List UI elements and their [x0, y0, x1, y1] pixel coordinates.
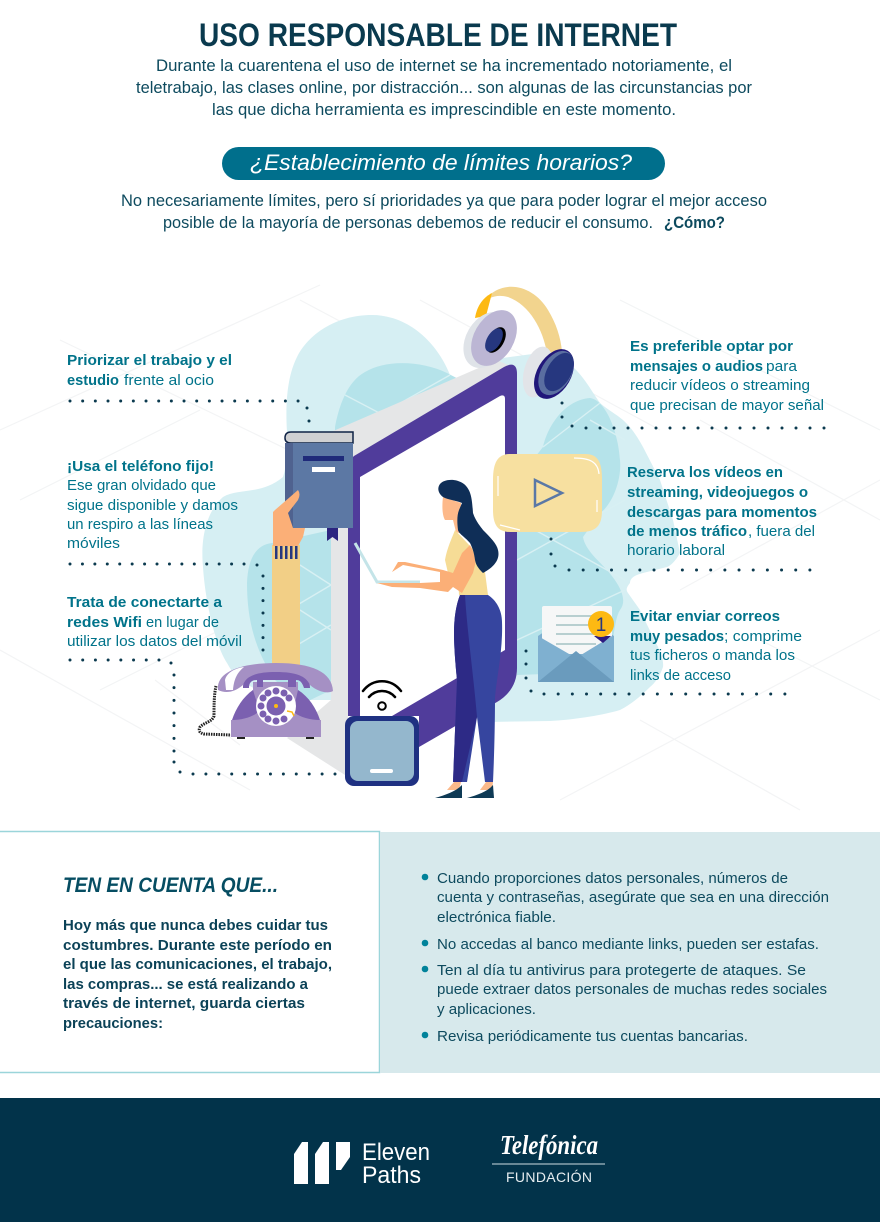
tip: teléfono fijo [67, 458, 238, 552]
heading pill: establecimiento de límites: ¿Establecimiento de límites horarios? [250, 150, 633, 175]
logo: Eleven Paths: Paths [362, 1162, 421, 1189]
tip: redes wifi: redes Wifi [67, 614, 142, 631]
tip: correos pesados: tus ficheros o manda los [630, 647, 795, 664]
tip: mensajes o audios: para [766, 358, 798, 375]
tip: reserva streaming [627, 464, 817, 559]
intro text block [136, 57, 752, 119]
panel: lista de precauciones: Cuando proporciones datos personales, números de [437, 870, 788, 887]
dotted connector: wifi [70, 660, 336, 774]
dotted connector: mensajes o audios [562, 403, 825, 428]
tip: redes wifi: utilizar los datos del móvil [67, 633, 242, 650]
tip: reserva streaming: descargas para momentos [627, 504, 817, 521]
panel: lista de precauciones: Ten al día tu antivirus para protegerte de ataques. Se [437, 962, 806, 979]
tip: teléfono fijo: móviles [67, 535, 120, 552]
tip: reserva streaming: de menos tráfico [627, 523, 747, 540]
illustration: tablet device [287, 360, 517, 775]
panel: ten en cuenta que: el que las comunicaciones, el trabajo, [63, 956, 332, 973]
icon: rotary telephone [199, 663, 333, 739]
tip: teléfono fijo: ¡Usa el teléfono fijo! [67, 458, 214, 475]
tip: correos pesados [630, 608, 802, 684]
panel: lista de precauciones: puede extraer datos personales de muchas redes sociales [437, 981, 827, 998]
tip: mensajes o audios: Es preferible optar por [630, 338, 793, 355]
icon: envelope with notification [538, 606, 614, 682]
tip: mensajes o audios [630, 338, 824, 414]
logo: Telefónica Fundación: FUNDACIÓN [506, 1169, 592, 1185]
tip: correos pesados: Evitar enviar correos [630, 608, 780, 625]
panel: ten en cuenta que: las compras... se está realizando a [63, 976, 309, 993]
tip: mensajes o audios: reducir vídeos o streaming [630, 377, 810, 394]
icon: wifi router [345, 681, 419, 786]
logo: Eleven Paths [294, 1139, 430, 1189]
panel: ten en cuenta que: TEN EN CUENTA QUE... [63, 874, 278, 897]
panel: ten en cuenta que: precauciones: [63, 1015, 163, 1032]
panel: lista de precauciones: electrónica fiable. [437, 909, 556, 926]
panel: lista de precauciones: No accedas al banco mediante links, pueden ser estafas. [437, 936, 819, 953]
footer band [0, 1098, 880, 1222]
dotted connector: priorizar [70, 401, 309, 421]
logo: Telefónica Fundación: Telefónica [500, 1130, 598, 1160]
tip: redes wifi: en lugar de [146, 614, 219, 631]
paragraph: prioridades [121, 192, 767, 232]
dotted connector: correos [526, 651, 786, 694]
icon: book held by arm [272, 432, 353, 665]
panel: ten en cuenta que: costumbres. Durante este período en [63, 937, 332, 954]
tip: priorizar el trabajo [67, 352, 232, 389]
tip: teléfono fijo: sigue disponible y damos [67, 497, 238, 514]
paragraph: prioridades: ¿Cómo? [664, 214, 725, 232]
panel: lista de precauciones [380, 832, 880, 1073]
panel: ten en cuenta que: través de internet, guarda ciertas [63, 995, 305, 1012]
tip: reserva streaming: horario laboral [627, 542, 725, 559]
dotted connector: streaming [551, 539, 811, 570]
tip: correos pesados: links de acceso [630, 667, 731, 684]
tip: priorizar el trabajo: estudio [67, 372, 119, 389]
paragraph: prioridades: posible de la mayoría de personas debemos de reducir el consumo. [163, 214, 653, 232]
tip: priorizar el trabajo: frente al ocio [124, 372, 214, 389]
tip: reserva streaming: streaming, videojuegos o [627, 484, 808, 501]
intro text block: Durante la cuarentena el uso de internet se ha incrementado notoriamente, el [156, 57, 732, 75]
tip: teléfono fijo: un respiro a las líneas [67, 516, 213, 533]
logo: Eleven Paths: Eleven [362, 1139, 430, 1166]
panel: lista de precauciones: Revisa periódicamente tus cuentas bancarias. [437, 1028, 748, 1045]
tip: correos pesados: ; comprime [724, 628, 802, 645]
tip: redes wifi [67, 594, 242, 650]
tip: mensajes o audios: que precisan de mayor señal [630, 397, 824, 414]
icon: video play button [493, 454, 602, 532]
illustration: woman with laptop [355, 480, 502, 798]
dotted connector: teléfono fijo [70, 564, 263, 651]
tip: teléfono fijo: Ese gran olvidado que [67, 477, 216, 494]
intro text block: teletrabajo, las clases online, por distracción... son algunas de las circunstancias por [136, 79, 752, 97]
panel: lista de precauciones: y aplicaciones. [437, 1001, 536, 1018]
tip: reserva streaming: Reserva los vídeos en [627, 464, 783, 481]
logo: Telefónica Fundación [492, 1130, 605, 1185]
tip: mensajes o audios: mensajes o audios [630, 358, 763, 375]
tip: priorizar el trabajo: Priorizar el trabajo y el [67, 352, 232, 369]
icon: headphones [454, 287, 582, 406]
panel: ten en cuenta que: Hoy más que nunca debes cuidar tus [63, 917, 328, 934]
heading pill: establecimiento de límites [222, 147, 665, 180]
panel: lista de precauciones: cuenta y contraseñas, asegúrate que sea en una dirección [437, 889, 829, 906]
intro text block: las que dicha herramienta es imprescindible en este momento. [212, 101, 676, 119]
paragraph: prioridades: No necesariamente límites, pero sí prioridades ya que para poder lograr el mejor acceso [121, 192, 767, 210]
tip: reserva streaming: , fuera del [748, 523, 815, 540]
tip: redes wifi: Trata de conectarte a [67, 594, 223, 611]
icon: envelope with notification: 1 [596, 615, 606, 636]
illustration background: grid and blobs [0, 285, 880, 810]
panel: ten en cuenta que [0, 832, 380, 1072]
title: USO RESPONSABLE DE INTERNET [199, 17, 677, 53]
tip: correos pesados: muy pesados [630, 628, 724, 645]
